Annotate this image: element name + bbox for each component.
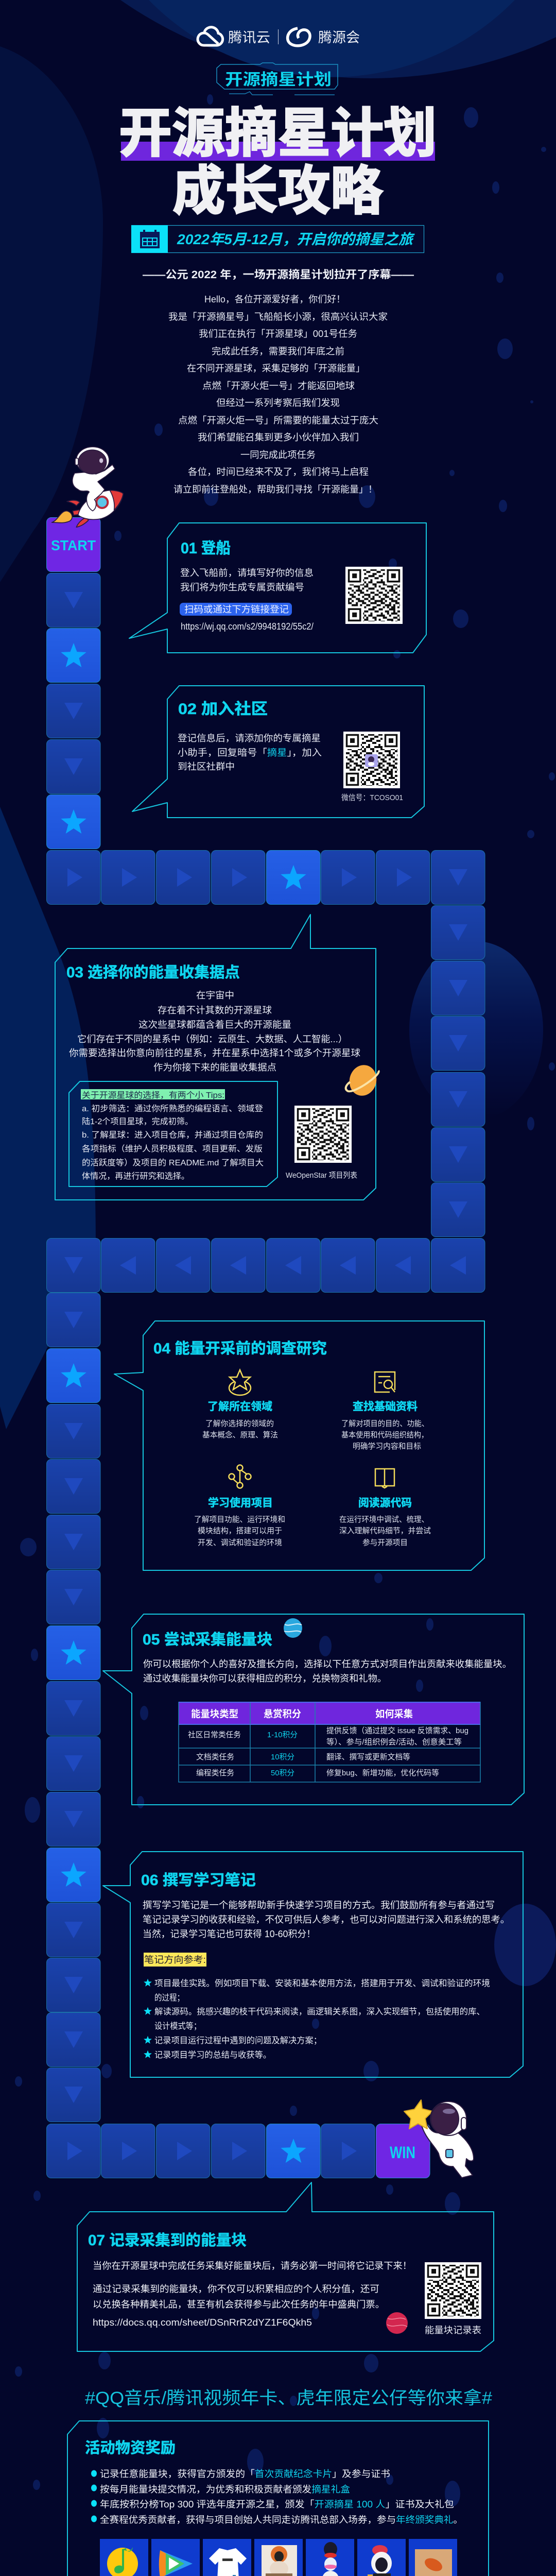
tag: program name xyxy=(217,63,338,95)
panel: 05 collect energy xyxy=(103,1614,524,1805)
QR code: assistant xyxy=(343,732,400,788)
intro text: 在不同开源星球，采集足够的「开源能量」 xyxy=(187,363,365,374)
intro text xyxy=(168,294,388,495)
panel: 04 research xyxy=(114,1321,484,1570)
bullet list: 解读源码。挑感兴趣的枝干代码来阅读，画逻辑关系图，深入实现细节，包括使用的库、 xyxy=(154,2007,485,2016)
intro text: 我们希望能召集到更多小伙伴加入我们 xyxy=(198,432,359,443)
icon: branching nodes xyxy=(229,1465,251,1488)
panel 05 description: 通过收集能量块你可以获得相应的积分，兑换物资和礼物。 xyxy=(143,1673,387,1684)
panel: 03 choose base xyxy=(55,914,380,1200)
prize: tiger penguin figure xyxy=(254,2539,303,2576)
QR code: registration xyxy=(345,567,403,624)
intro text: 点燃「开源火炬一号」才能返回地球 xyxy=(202,381,355,391)
panel: 02 join community: 02 加入社区 xyxy=(178,701,268,718)
panel 03 description: 在宇宙中 xyxy=(196,990,234,1001)
panel: 06 write notes xyxy=(103,1852,523,2077)
bullet list: 的过程； xyxy=(154,1993,184,2003)
panel 02 description: 到社区社群中 xyxy=(178,761,235,772)
callout: note directions xyxy=(144,1953,206,1967)
QR caption: 能量块记录表 xyxy=(425,2325,481,2335)
inner panel: tips: 的活跃度等）及项目的 README.md 了解项目大 xyxy=(82,1158,264,1167)
hashtag headline: #QQ音乐/腾讯视频年卡、虎年限定公仔等你来拿# xyxy=(85,2388,492,2408)
panel: 07 record energy xyxy=(77,2182,494,2351)
item: read source code: 参与开源项目 xyxy=(362,1538,408,1547)
panel 02 description: 小助手，回复暗号「 摘星」，加入 xyxy=(178,748,322,758)
item: learn to use project: 学习使用项目 xyxy=(208,1497,273,1509)
item: learn to use project: 了解项目功能、运行环境和 xyxy=(194,1515,285,1524)
item: learn to use project xyxy=(194,1497,285,1547)
text: Tencent Open Source: 腾源会 xyxy=(318,30,360,45)
item: understand field: 了解你选择的领域的 xyxy=(205,1419,274,1428)
wechat id: 微信号：TCOSO01 xyxy=(341,793,403,802)
text: Tencent Cloud: 腾讯云 xyxy=(228,30,270,45)
panel 03 description: 这次些星球都蕴含着巨大的开源能量 xyxy=(138,1020,291,1030)
right column segment xyxy=(431,906,485,1236)
item: find materials: 明确学习内容和目标 xyxy=(353,1442,421,1451)
table: energy types: 修复bug、新增功能，优化代码等 xyxy=(326,1768,439,1777)
panel 06 description: 当然，记录学习笔记也可获得 10-60积分！ xyxy=(143,1929,316,1939)
item: read source code: 在运行环境中调试、梳理、 xyxy=(339,1515,429,1524)
panel: 02 join community xyxy=(132,686,424,818)
start tile xyxy=(46,517,100,572)
inner panel: tips: 关于开源星球的选择，有两个小 Tips: xyxy=(82,1091,224,1100)
intro text: 各位，时间已经来不及了，我们将马上启程 xyxy=(188,467,369,477)
table: energy types: 能量块类型 xyxy=(191,1708,238,1720)
item: read source code xyxy=(339,1497,431,1547)
table: energy types: 50积分 xyxy=(271,1769,294,1777)
item: understand field: 基本概念、原理、算法 xyxy=(202,1430,278,1439)
logos: Tencent Cloud and Tencent Open Source xyxy=(198,27,360,46)
panel: 01 board the ship: 01 登船 xyxy=(181,540,231,557)
item: read source code: 深入理解代码细节，并尝试 xyxy=(339,1527,431,1535)
intro text: Hello，各位开源爱好者，你们好！ xyxy=(204,294,345,304)
reward list: 全赛程优秀贡献者，获得与项目创始人共同走访腾讯总部入场券，参与 年终颁奖典礼。 xyxy=(100,2515,463,2525)
icon: calendar xyxy=(140,230,160,248)
panel 01 description: 登入飞船前，请填写好你的信息 xyxy=(180,568,314,578)
inner panel: tips: a. 初步筛选：通过你所熟悉的编程语言、领域登 xyxy=(82,1104,263,1113)
panel 03 description xyxy=(69,990,360,1073)
item: find materials: 查找基础资料 xyxy=(353,1401,418,1413)
panel: 03 choose base: 03 选择你的能量收集据点 xyxy=(66,964,240,981)
panel 02 description xyxy=(178,733,322,772)
item: find materials: 基本使用和代码组织结构， xyxy=(341,1431,428,1439)
intro text: 我们正在执行「开源星球」001号任务 xyxy=(199,329,357,339)
panel 07 description: 当你在开源星球中完成任务采集好能量块后，请务必第一时间将它记录下来！ xyxy=(93,2261,412,2271)
reward list: 年底按积分榜Top 300 评选年度开源之星，颁发「 开源摘星 100 人 」证书及大礼包 xyxy=(100,2499,454,2510)
item: learn to use project: 模块结构，搭建可以用于 xyxy=(198,1527,282,1535)
item: understand field: 了解所在领域 xyxy=(207,1401,272,1413)
prize: stacked penguins xyxy=(306,2539,354,2576)
icon: swirl logo xyxy=(288,28,310,46)
panel: 07 record energy: 07 记录采集到的能量块 xyxy=(88,2232,247,2249)
table: energy types: 10积分 xyxy=(271,1753,294,1761)
panel 07 description: 通过记录采集到的能量块，你不仅可以积累相应的个人积分值，还可 xyxy=(93,2284,379,2294)
title: 成长攻略 xyxy=(172,161,383,221)
bullet list: 项目最佳实践。例如项目下载、安装和基本使用方法，搭建用于开发、调试和验证的环境 xyxy=(154,1978,490,1988)
date banner xyxy=(131,225,424,253)
table: energy types: 文档类任务 xyxy=(196,1753,234,1761)
reward list: 按每月能量块提交情况，为优秀和积极贡献者颁发 摘星礼盒 xyxy=(100,2484,350,2495)
win tile: WIN xyxy=(390,2143,415,2162)
table: energy types xyxy=(179,1702,480,1782)
row segment to win xyxy=(46,2124,375,2178)
bullet list: 记录项目运行过程中遇到的问题及解决方案； xyxy=(154,2036,322,2045)
panel 07 description: https://docs.qq.com/sheet/DSnRrR2dYZ1F6Qkh5 xyxy=(93,2317,312,2328)
bullet list: 设计模式等； xyxy=(154,2021,201,2031)
table: energy types: 悬赏积分 xyxy=(264,1708,301,1720)
registration link: https://wj.qq.com/s2/9948192/55c2/ xyxy=(181,621,314,632)
astronaut on rocket xyxy=(52,447,123,527)
astronaut holding star xyxy=(404,2100,474,2178)
icon: cloud logo xyxy=(198,27,223,45)
intro text: 点燃「开源火炬一号」所需要的能量太过于庞大 xyxy=(178,415,378,426)
item: learn to use project: 开发、调试和验证的环境 xyxy=(198,1538,282,1547)
QR code: energy record xyxy=(425,2262,481,2319)
panel: 04 research: 04 能量开采前的调查研究 xyxy=(153,1340,327,1357)
start tile: START xyxy=(51,537,96,553)
title highlight bar xyxy=(121,142,435,161)
callout: register pill: 扫码或通过下方链接登记 xyxy=(184,604,289,615)
inner panel: tips: 各项指标（维护人员积极程度、项目更新、发版 xyxy=(82,1144,263,1154)
title xyxy=(119,104,437,221)
bullet list: 记录项目学习的总结与收获等。 xyxy=(154,2050,271,2060)
panel: 06 write notes: 06 撰写学习笔记 xyxy=(141,1872,256,1889)
icon: blue planet xyxy=(284,1618,302,1638)
prize: t-shirt xyxy=(203,2539,251,2576)
row segment left xyxy=(46,1239,485,1292)
panel 05 description xyxy=(143,1659,512,1684)
intro text: 但经过一系列考察后我们发现 xyxy=(216,398,340,408)
tag: program name: 开源摘星计划 xyxy=(225,71,332,89)
item: understand field xyxy=(202,1401,278,1439)
callout: note directions: 笔记方向参考: xyxy=(144,1955,206,1965)
table: energy types: 编程类任务 xyxy=(196,1769,234,1777)
reward list xyxy=(91,2468,463,2525)
table: energy types: 如何采集 xyxy=(375,1708,413,1720)
panel 01 description: 我们将为你生成专属贡献编号 xyxy=(180,582,304,592)
item: find materials xyxy=(341,1401,429,1451)
icon: open book xyxy=(375,1469,394,1488)
icon: orange ringed planet xyxy=(346,1062,380,1099)
prize: penguin mascot xyxy=(357,2539,406,2576)
panel: rewards xyxy=(67,2421,489,2576)
intro text: 一同完成此项任务 xyxy=(240,450,316,460)
inner panel: tips: 体情况，再进行研究和选择。 xyxy=(82,1172,189,1181)
date banner: 2022年5月-12月，开启你的摘星之旅 xyxy=(177,231,415,247)
board: path tiles xyxy=(46,517,485,2178)
panel: rewards: 活动物资奖励 xyxy=(85,2439,176,2456)
icon: document search xyxy=(375,1372,395,1392)
intro text: 我是「开源摘星号」飞船船长小源，很高兴认识大家 xyxy=(168,312,388,322)
panel 07 description: 以兑换各种精美礼品，甚至有机会获得参与此次任务的年中盛典门票。 xyxy=(93,2299,385,2310)
table: energy types: 翻译、撰写或更新文档等 xyxy=(326,1752,410,1761)
left column segment 2 xyxy=(46,1293,100,2122)
QR code: project list xyxy=(294,1106,352,1163)
subheading: ——公元 2022 年，一场开源摘星计划拉开了序幕—— xyxy=(143,268,414,281)
inner panel: tips xyxy=(69,1081,277,1187)
inner panel: tips: b. 了解星球：进入项目仓库，并通过项目仓库的 xyxy=(82,1130,263,1140)
panel: 05 collect energy: 05 尝试采集能量块 xyxy=(143,1631,272,1648)
table: energy types: 提供反馈（通过提交 issue 反馈需求、bug xyxy=(326,1726,468,1735)
item: read source code: 阅读源代码 xyxy=(358,1497,412,1509)
bullet list xyxy=(144,1978,490,2060)
intro text: 请立即前往登船处，帮助我们寻找「开源能量」！ xyxy=(173,484,377,495)
table: energy types: 1-10积分 xyxy=(267,1731,298,1739)
table: energy types: 社区日常类任务 xyxy=(188,1731,241,1739)
win tile xyxy=(376,2124,430,2178)
title: 开源摘星计划 xyxy=(119,104,437,163)
item: find materials: 了解对项目的目的、功能、 xyxy=(341,1419,429,1428)
panel 05 description: 你可以根据你个人的喜好及擅长方向，选择以下任意方式对项目作出贡献来收集能量块。 xyxy=(143,1659,512,1669)
QR caption: WeOpenStar 项目列表 xyxy=(286,1171,357,1180)
icon: star on ring xyxy=(229,1370,251,1395)
panel 01 description xyxy=(180,568,314,592)
inner panel: tips: 陆1-2个项目星球，完成初筛。 xyxy=(82,1116,193,1126)
panel 02 description: 登记信息后，请添加你的专属摘星 xyxy=(178,733,321,743)
prize: QQ music card xyxy=(100,2539,148,2576)
panel 06 description: 撰写学习笔记是一个能够帮助新手快速学习项目的方式。我们鼓励所有参与者通过写 xyxy=(143,1900,495,1910)
intro text: 完成此任务，需要我们年底之前 xyxy=(212,346,344,357)
table: energy types: 等）、参与/组织例会/活动、创意美工等 xyxy=(326,1737,462,1747)
row segment right xyxy=(46,850,485,905)
panel 03 description: 它们存在于不同的星系中（例如：云原生、大数据、人工智能...） xyxy=(77,1034,348,1044)
panel 06 description xyxy=(143,1900,510,1939)
panel 03 description: 存在着不计其数的开源星球 xyxy=(158,1005,272,1015)
prize: photo xyxy=(409,2539,457,2576)
panel 03 description: 你需要选择出你意向前往的星系，并在星系中选择1个或多个开源星球 xyxy=(69,1048,360,1058)
icon: red planet xyxy=(386,2312,408,2334)
panel 03 description: 作为你接下来的能量收集据点 xyxy=(153,1062,276,1073)
left column segment 1 xyxy=(46,573,100,849)
reward list: 记录任意能量块，获得官方颁发的「 首次贡献纪念卡片 」及参与证书 xyxy=(100,2468,390,2479)
prize: Tencent video card xyxy=(151,2539,200,2576)
panel 06 description: 笔记记录学习的收获和经验，不仅可供后人参考，也可以对问题进行深入和系统的思考。 xyxy=(143,1914,510,1925)
panel: 01 board the ship xyxy=(129,523,426,653)
panel 07 description xyxy=(93,2261,412,2328)
